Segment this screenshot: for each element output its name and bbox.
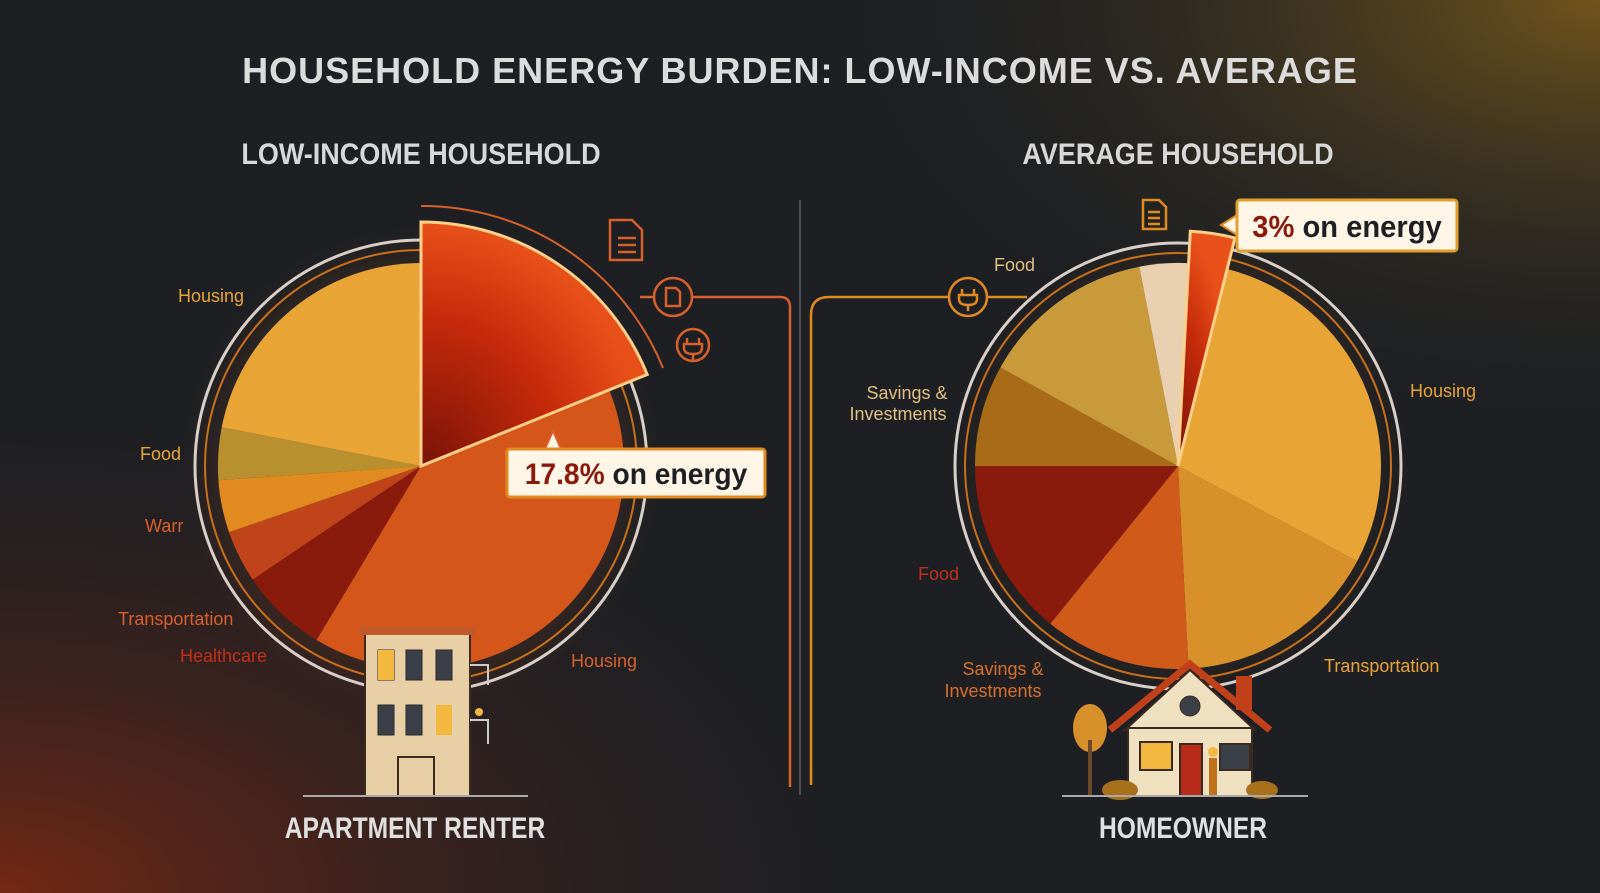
labels: right pie [849,255,1476,701]
labels: right pie: Investments [849,404,947,424]
icon: apartment building [303,627,528,796]
labels: right pie: Investments [944,681,1042,701]
labels: left pie: Transportation [118,609,233,629]
title: HOUSEHOLD ENERGY BURDEN: LOW-INCOME VS. AVERAGE [242,50,1358,91]
labels: left pie [118,286,637,671]
callout: 17.8%: 17.8% on energy [525,458,748,491]
callout: 17.8% [507,431,765,497]
panel: average pie [946,231,1410,698]
icons: right document / plug [811,200,1166,785]
icons: left document / plug [610,220,790,787]
callout: 3%: 3% on energy [1252,210,1442,244]
labels: right pie: Food [918,564,959,584]
heading: low-income: LOW-INCOME HOUSEHOLD [241,138,601,171]
labels: left pie: Housing [178,286,244,306]
heading: average: AVERAGE HOUSEHOLD [1022,138,1334,171]
energy slice [1178,231,1235,466]
labels: left pie: Healthcare [180,646,267,666]
icon: house [1062,664,1308,800]
labels: right pie: Savings & [962,659,1044,679]
panel: low-income pie [181,206,663,706]
labels: right pie: Savings & [866,383,948,403]
label: apartment renter: APARTMENT RENTER [285,811,545,845]
labels: left pie: Food [140,444,181,464]
labels: left pie: Housing [571,651,637,671]
label: homeowner: HOMEOWNER [1099,811,1267,845]
labels: left pie: Warr [145,516,183,536]
labels: right pie: Transportation [1324,656,1439,676]
labels: right pie: Food [994,255,1035,275]
energy slice [421,222,647,466]
callout: 3% [1221,200,1457,251]
labels: right pie: Housing [1410,381,1476,401]
